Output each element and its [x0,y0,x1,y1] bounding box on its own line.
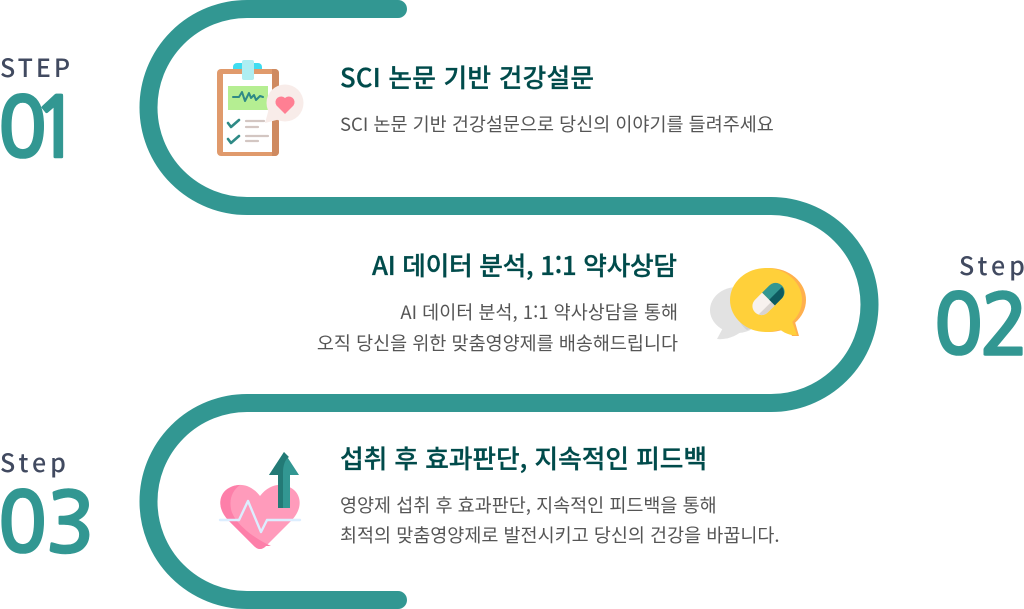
step 2 description: AI 데이터 분석, 1:1 약사상담을 통해 [400,299,678,325]
step 3 description: 최적의 맞춤영양제로 발전시키고 당신의 건강을 바꿉니다. [340,522,780,548]
step 02 label: 0 [933,284,984,368]
icon: clipboard with heart [217,60,304,156]
step 3 description: 영양제 섭취 후 효과판단, 지속적인 피드백을 통해 [340,492,717,518]
step 2 description [317,299,678,356]
step 03 label [0,444,96,566]
icon: heart with upward arrow [220,452,300,549]
step 01 label: STEP [0,49,73,85]
icon: speech bubbles with pill [710,268,806,339]
step 03 label: 3 [45,482,96,566]
step 3 description [340,492,780,548]
step 01 label [0,49,82,171]
step 02 label [933,247,1024,368]
winding teal track [148,9,870,600]
step 2 description: 오직 당신을 위한 맞춤영양제를 배송해드립니다 [317,330,678,356]
step 03 label: Step [0,444,70,480]
step 2 heading: AI 데이터 분석, 1:1 약사상담 [372,246,677,283]
step 01 label: 1 [31,87,82,171]
step 1 heading: SCI 논문 기반 건강설문 [340,58,594,95]
step 3 heading: 섭취 후 효과판단, 지속적인 피드백 [340,439,707,476]
step 1 description: SCI 논문 기반 건강설문으로 당신의 이야기를 들려주세요 [340,111,774,137]
